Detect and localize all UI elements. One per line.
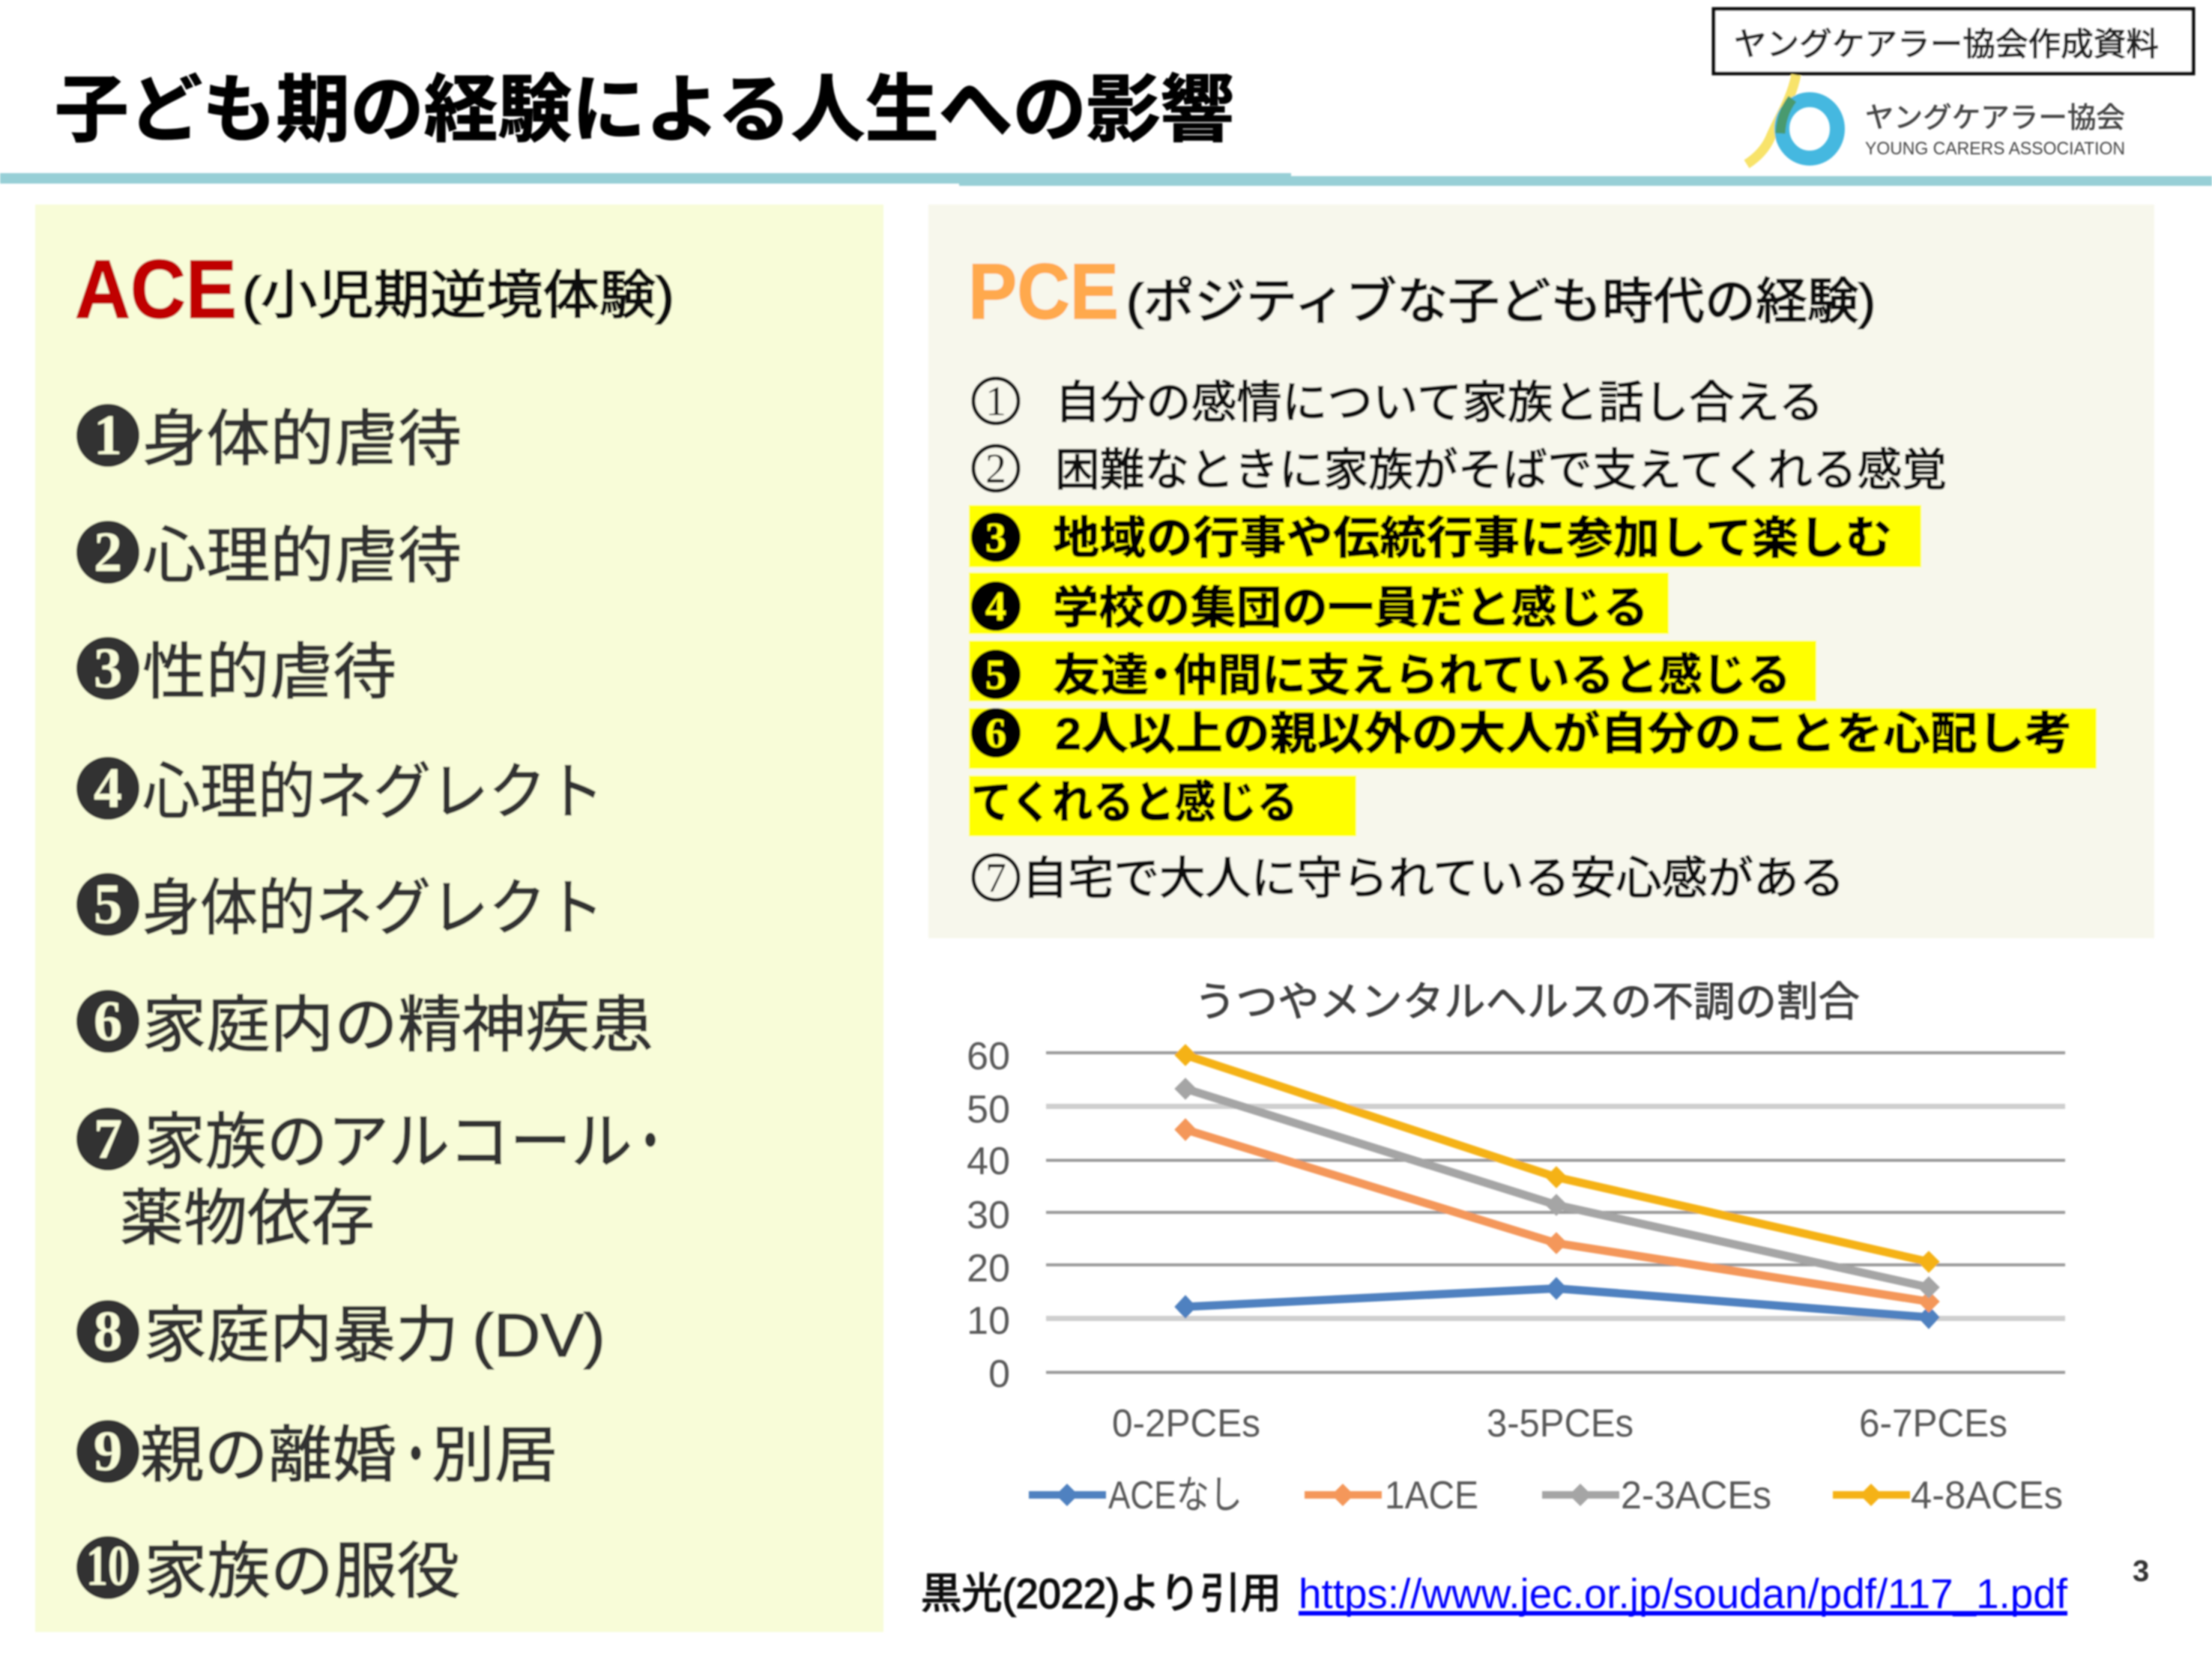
logo: Young Carers Association xyxy=(1747,75,2125,164)
item 7: ・ xyxy=(628,1108,673,1176)
title: 子ども期の経験による人生への影響 xyxy=(55,68,1234,151)
item 1: 1 xyxy=(985,378,1006,425)
citation xyxy=(921,1570,2067,1617)
item 5: 友達 xyxy=(1053,650,1149,701)
item 6 xyxy=(971,708,2072,828)
item 9: ・ xyxy=(394,1421,438,1490)
legend: ACEなし xyxy=(1108,1474,1242,1517)
series: 2-3ACEs xyxy=(1175,1078,1939,1298)
item 8 xyxy=(76,1300,605,1370)
item 6: てくれると感じる xyxy=(971,778,1298,828)
item 5: 5 xyxy=(94,873,122,936)
legend: 2-3ACEs xyxy=(1621,1474,1771,1517)
logo: Young Carers Association: ヤングケアラー協会 xyxy=(1865,103,2125,134)
item 6: 家庭内の精神疾患 xyxy=(142,991,653,1060)
item 7: 自宅で大人に守られている安心感がある xyxy=(1022,853,1845,904)
item 9: 別居 xyxy=(432,1421,557,1490)
item 9: 9 xyxy=(94,1420,122,1483)
heading: ACE: ACE xyxy=(75,244,237,336)
citation: 黒光(2022)より引用 xyxy=(921,1570,1281,1617)
y axis labels: 60 xyxy=(967,1035,1010,1078)
item 6: 6 xyxy=(985,710,1006,757)
series: ACEなし xyxy=(1175,1278,1939,1329)
series: 1ACE xyxy=(1175,1119,1939,1312)
y axis labels: 40 xyxy=(967,1140,1010,1183)
item 7 xyxy=(76,1107,673,1253)
item 7: 家族のアルコール xyxy=(144,1108,632,1176)
y axis labels: 20 xyxy=(967,1247,1010,1290)
item 8: (DV) xyxy=(472,1302,605,1370)
item 6: 2人以上の親以外の大人が自分のことを心配し考 xyxy=(1055,709,2072,759)
item 10: 家族の服役 xyxy=(144,1538,460,1606)
item 2: 困難なときに家族がそばで支えてくれる感覚 xyxy=(1055,445,1947,495)
source badge: ヤングケアラー協会作成資料 xyxy=(1734,27,2159,63)
chart title: うつやメンタルヘルスの不調の割合 xyxy=(1194,979,1860,1025)
item 8: 家庭内暴力 xyxy=(144,1302,459,1370)
item 2: 心理的虐待 xyxy=(142,522,462,590)
item 9 xyxy=(76,1420,557,1490)
item 8: 8 xyxy=(94,1300,122,1363)
item 5: 5 xyxy=(985,652,1006,698)
series: 4-8ACEs xyxy=(1175,1045,1939,1272)
item 3: 地域の行事や伝統行事に参加して楽しむ xyxy=(1053,513,1892,563)
item 7: 7 xyxy=(985,855,1006,901)
heading: ACE description: (小児期逆境体験) xyxy=(242,266,674,324)
header rule xyxy=(0,173,2212,186)
y axis labels: 10 xyxy=(967,1299,1010,1343)
item 4: 4 xyxy=(94,757,122,820)
item 3: 3 xyxy=(94,637,122,700)
legend: 1ACE xyxy=(1385,1474,1478,1517)
item 5: ・ xyxy=(1138,650,1183,701)
item 9: 親の離婚 xyxy=(140,1421,396,1490)
item 2: 2 xyxy=(94,521,122,584)
highlight bars xyxy=(969,505,2097,836)
page number: 3 xyxy=(2133,1555,2149,1588)
source badge xyxy=(1714,9,2193,73)
line chart xyxy=(967,979,2065,1517)
logo: Young Carers Association: YOUNG CARERS ASSOCIATION xyxy=(1865,139,2125,159)
x axis labels: 6-7PCEs xyxy=(1859,1402,2007,1445)
item 4: 心理的ネグレクト xyxy=(142,758,604,827)
legend: 4-8ACEs xyxy=(1911,1474,2063,1517)
item 7: 7 xyxy=(94,1107,122,1170)
y axis labels xyxy=(967,1035,1010,1396)
heading: PCE description: (ポジティブな子ども時代の経験) xyxy=(1126,274,1876,329)
x axis labels: 3-5PCEs xyxy=(1487,1402,1634,1445)
citation: https://www.jec.or.jp/soudan/pdf/117_1.pdf xyxy=(1299,1570,2067,1617)
y axis labels: 0 xyxy=(988,1353,1010,1396)
x axis labels xyxy=(1112,1402,2007,1445)
item 4: 4 xyxy=(985,584,1006,630)
item 4: 学校の集団の一員だと感じる xyxy=(1053,583,1649,633)
item 7: 薬物依存 xyxy=(120,1185,375,1253)
item 3: 3 xyxy=(985,515,1006,561)
item 5: 身体的ネグレクト xyxy=(142,874,604,943)
y axis labels: 30 xyxy=(967,1194,1010,1237)
y axis labels: 50 xyxy=(967,1088,1010,1131)
item 2: 2 xyxy=(985,446,1006,492)
panel: ACE xyxy=(35,205,883,1632)
item 3: 性的虐待 xyxy=(142,638,396,707)
item 6: 6 xyxy=(94,990,122,1053)
panel: PCE xyxy=(928,205,2154,938)
item 5: 仲間に支えられていると感じる xyxy=(1173,650,1791,701)
item 1: 自分の感情について家族と話し合える xyxy=(1055,378,1824,428)
item 10: 10 xyxy=(86,1535,130,1598)
legend xyxy=(1029,1474,2063,1517)
item 1: 1 xyxy=(94,404,122,467)
heading: PCE: PCE xyxy=(968,248,1119,336)
x axis labels: 0-2PCEs xyxy=(1112,1402,1260,1445)
item 1: 身体的虐待 xyxy=(142,405,462,474)
